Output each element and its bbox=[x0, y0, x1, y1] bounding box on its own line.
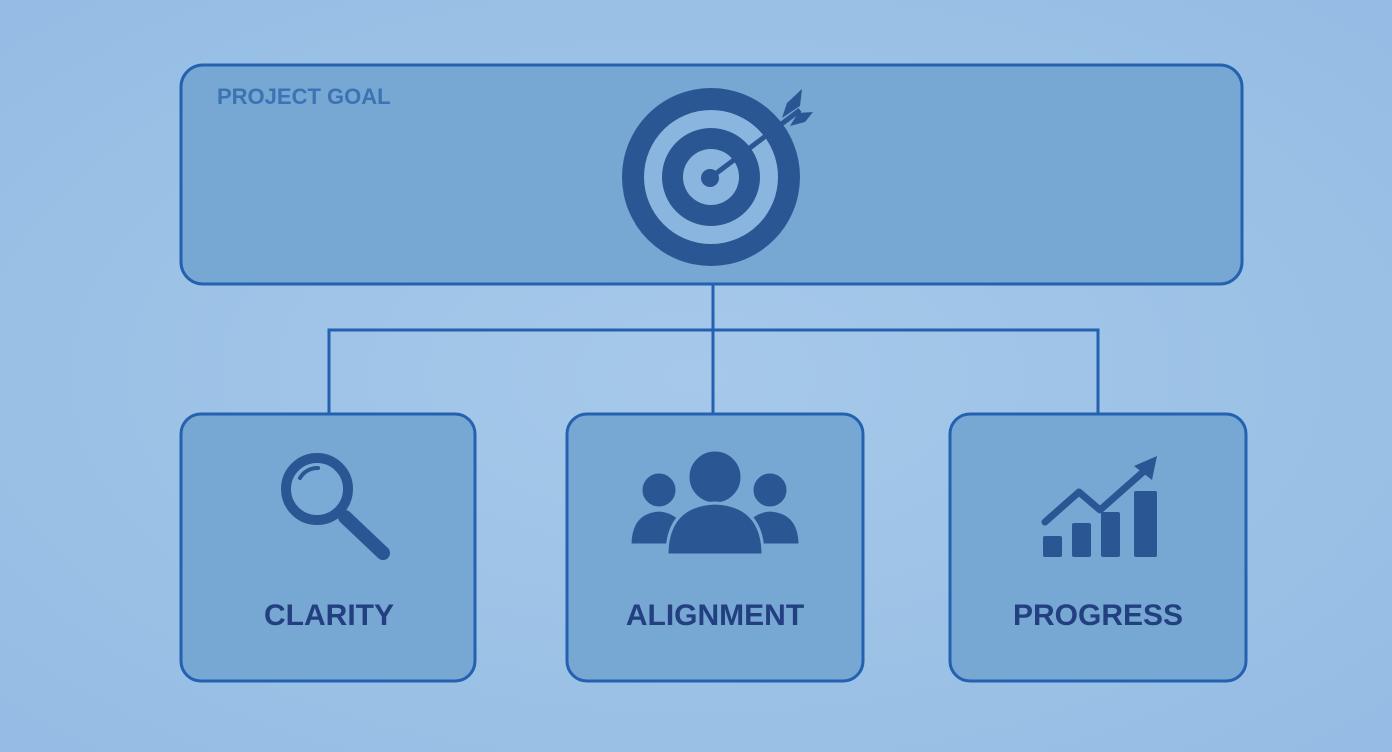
panel: progress bbox=[950, 414, 1246, 681]
icon: magnifier bbox=[286, 458, 383, 553]
icon: people bbox=[630, 450, 800, 555]
icon: target bbox=[622, 88, 813, 266]
panel: project goal bbox=[181, 65, 1242, 284]
label: progress: PROGRESS bbox=[1013, 599, 1183, 632]
panel: alignment bbox=[567, 414, 863, 681]
label: clarity: CLARITY bbox=[264, 599, 394, 632]
label: alignment: ALIGNMENT bbox=[626, 599, 804, 632]
panel: clarity bbox=[181, 414, 475, 681]
heading: project goal: PROJECT GOAL bbox=[217, 84, 391, 109]
connector lines bbox=[329, 284, 1098, 413]
icon: growth chart bbox=[1043, 456, 1157, 557]
